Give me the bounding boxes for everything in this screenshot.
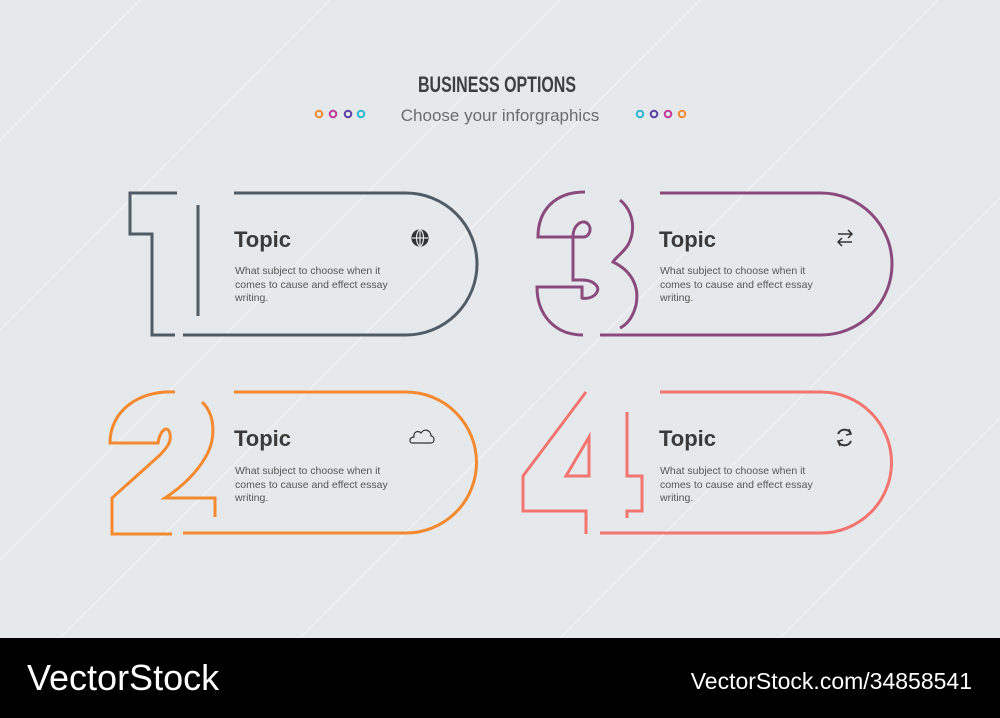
panel: 3: What subject to choose when it [660, 265, 805, 277]
icon: refresh [838, 429, 851, 446]
icon: transfer arrows [838, 230, 852, 246]
panel: 4 [523, 392, 891, 534]
card 1 frame [183, 193, 477, 335]
card 3 frame [600, 193, 892, 335]
footer bar: VectorStock [27, 657, 220, 698]
footer bar: VectorStock.com/34858541 [691, 668, 972, 694]
panel: 4: What subject to choose when it [660, 465, 805, 477]
panel: 1: comes to cause and effect essay [235, 279, 388, 291]
dots right [637, 111, 685, 117]
dots left [316, 111, 364, 117]
icon: cloud [410, 430, 434, 443]
panel: 2: writing. [234, 492, 268, 504]
card 2 frame [183, 392, 476, 533]
panel: 3: writing. [659, 292, 693, 304]
panel: 3: Topic [659, 227, 716, 252]
title: BUSINESS OPTIONS [418, 72, 576, 97]
subtitle: Choose your inforgraphics [401, 106, 599, 125]
number 4 outline [523, 392, 586, 534]
panel: 1: Topic [234, 227, 291, 252]
panel: 2: What subject to choose when it [235, 465, 380, 477]
panel: 1: What subject to choose when it [235, 265, 380, 277]
panel: 1 [130, 193, 477, 335]
panel: 2: Topic [234, 426, 291, 451]
panel: 4: comes to cause and effect essay [660, 479, 813, 491]
panel: 3: comes to cause and effect essay [660, 279, 813, 291]
footer bar [0, 638, 1000, 718]
panel: 2: comes to cause and effect essay [235, 479, 388, 491]
panel: 1: writing. [234, 292, 268, 304]
number 3 outline [537, 192, 598, 335]
number 1 outline [130, 193, 177, 335]
panel: 4: writing. [659, 492, 693, 504]
panel: 4: Topic [659, 426, 716, 451]
panel: 2 [110, 392, 476, 534]
panel: 3 [537, 192, 892, 335]
number 2 outline [110, 392, 175, 534]
card 4 frame [600, 392, 891, 533]
icon: globe [412, 230, 428, 246]
